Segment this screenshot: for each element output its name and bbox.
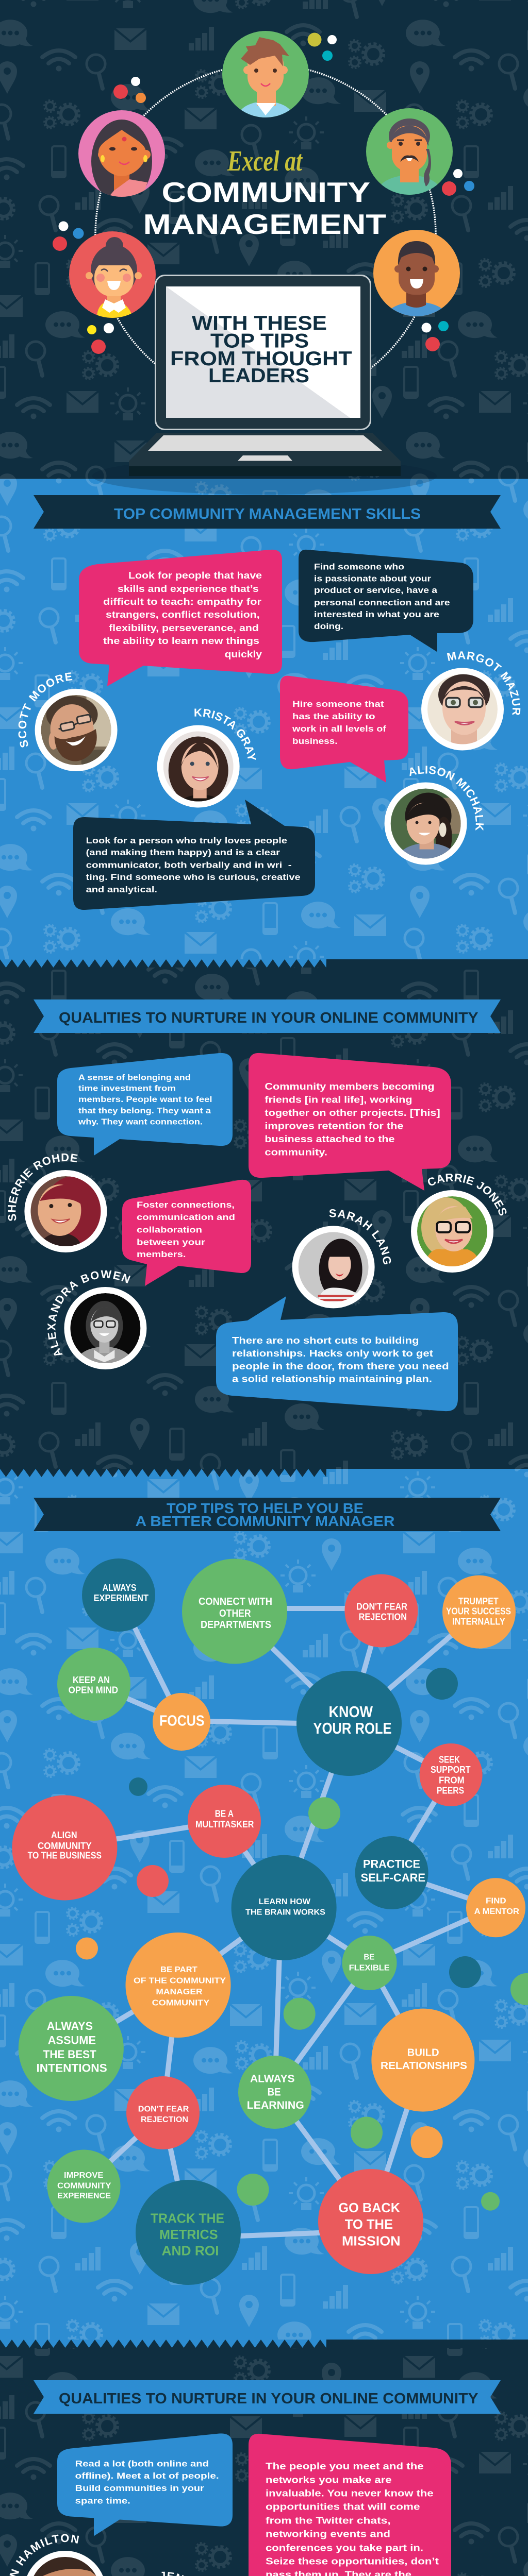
- panel: qualities to nurture, part two: [9, 2380, 501, 2576]
- node: be a multitasker: MULTITASKER: [195, 1819, 254, 1829]
- node: always be learning: [238, 2056, 311, 2129]
- quote: Evan Hamilton: [57, 2433, 233, 2536]
- banner heading: QUALITIES TO NURTURE IN YOUR ONLINE COMMUNITY: [59, 2391, 478, 2407]
- quote: Evan Hamilton: Build communities in your: [75, 2483, 204, 2493]
- dotted ring: [95, 64, 436, 404]
- node: always assume the best intentions: ASSUME: [48, 2033, 96, 2046]
- title: [143, 145, 386, 240]
- quote: Evan Hamilton: spare time.: [75, 2496, 130, 2506]
- quote: Scott Moore: flexibility, perseverance, and: [109, 623, 259, 633]
- node: align community to the business: COMMUNITY: [38, 1841, 92, 1851]
- panel: top community management skills: [19, 495, 521, 910]
- node: track the metrics and roi: AND ROI: [162, 2243, 219, 2258]
- quote: Carrie Jones: Community members becoming: [265, 1081, 435, 1092]
- quote: Alexandra Bowen: [122, 1180, 251, 1286]
- node: don't fear rejection: [344, 1574, 418, 1648]
- node: practice self-care: SELF-CARE: [361, 1871, 425, 1884]
- node: track the metrics and roi: TRACK THE: [151, 2210, 224, 2226]
- quote: Sarah Lang: a solid relationship maintaining plan.: [232, 1374, 432, 1384]
- banner heading: [34, 999, 501, 1033]
- node: be part of the community manager community: BE PART: [160, 1965, 197, 1974]
- node: know your role: KNOW: [329, 1703, 373, 1721]
- node: know your role: YOUR ROLE: [313, 1719, 392, 1737]
- quote: Sherrie Rohde: members. People want to feel: [78, 1095, 212, 1104]
- node: trumpet your success: [442, 1575, 516, 1649]
- quote: Scott Moore: Look for people that have: [128, 570, 262, 581]
- quote: Margot Mazur: doing.: [314, 621, 343, 631]
- node: keep an open mind: [57, 1648, 130, 1721]
- quote: Sarah Lang: There are no short cuts to building: [232, 1335, 419, 1346]
- node: learn how the brain works: LEARN HOW: [259, 1897, 311, 1906]
- laptop screen text: [170, 312, 352, 387]
- node: always assume the best intentions: THE BEST: [43, 2048, 96, 2061]
- node: practice self-care: PRACTICE: [363, 1858, 420, 1870]
- quote: Carrie Jones: friends [in real life], working: [265, 1095, 412, 1105]
- portrait: Alison Michalk: [385, 782, 467, 865]
- node: don't fear rejection, second: REJECTION: [141, 2115, 188, 2124]
- node: don't fear rejection, second: [126, 2076, 200, 2149]
- node: align community to the business: TO THE BUSINESS: [28, 1851, 102, 1861]
- node: find a mentor: [466, 1878, 525, 1937]
- quote: Sherrie Rohde: that they belong. They want a: [78, 1107, 211, 1115]
- laptop screen text: LEADERS: [208, 365, 309, 387]
- quote: Hannah Kovacs: [249, 2434, 451, 2576]
- panel: qualities to nurture, part one: [8, 999, 506, 1412]
- quote: Krista Gray: (and making them happy) and is a clear: [86, 848, 280, 857]
- quote: Margot Mazur: Find someone who: [314, 562, 404, 572]
- node: trumpet your success: TRUMPET: [458, 1596, 499, 1606]
- laptop screen text: FROM THOUGHT: [170, 348, 352, 370]
- node: improve community experience: IMPROVE: [64, 2171, 104, 2180]
- portrait: Margot Mazur: [421, 668, 504, 750]
- quote: Hannah Kovacs: networks you make are: [266, 2475, 392, 2485]
- header panel: [53, 31, 474, 495]
- quote: Margot Mazur: is passionate about your: [314, 574, 431, 583]
- node: trumpet your success: INTERNALLY: [452, 1617, 505, 1627]
- small accent dots: [76, 1668, 528, 2211]
- avatar: moustached man green: [366, 108, 453, 195]
- quote: Scott Moore: quickly: [225, 649, 262, 659]
- node: seek support from peers: SEEK: [439, 1754, 460, 1765]
- name: Krista Gray: KRISTA GRAY: [194, 708, 256, 760]
- quote: Krista Gray: and analytical.: [86, 885, 157, 894]
- quote: Margot Mazur: personal connection and are: [314, 598, 450, 607]
- quote: Margot Mazur: interested in what you are: [314, 609, 439, 619]
- name: Sherrie Rohde: SHERRIE ROHDE: [8, 1153, 77, 1221]
- node: always be learning: LEARNING: [247, 2099, 304, 2111]
- quote: Alison Michalk: work in all levels of: [292, 724, 386, 734]
- quote: Hannah Kovacs: networking events and: [266, 2529, 390, 2539]
- quote: Scott Moore: skills and experience that’s: [118, 584, 259, 594]
- panel: top tips network: [12, 1498, 528, 2285]
- shadow under laptop: [92, 457, 437, 495]
- quote: Carrie Jones: [249, 1053, 451, 1191]
- portrait: Alexandra Bowen: [64, 1287, 146, 1369]
- laptop screen text: TOP TIPS: [210, 330, 309, 352]
- node: focus: [153, 1693, 210, 1751]
- node: don't fear rejection, second: DON'T FEAR: [138, 2105, 189, 2114]
- banner heading: TOP COMMUNITY MANAGEMENT SKILLS: [114, 506, 421, 522]
- quote: Sherrie Rohde: why. They want connection.: [78, 1118, 203, 1127]
- node: align community to the business: ALIGN: [51, 1830, 77, 1840]
- node: connect with other departments: OTHER: [219, 1608, 251, 1619]
- quote: Hannah Kovacs: opportunities that will come: [266, 2502, 420, 2512]
- node: improve community experience: [47, 2149, 121, 2223]
- banner heading: A BETTER COMMUNITY MANAGER: [135, 1513, 395, 1529]
- node: always experiment: [82, 1558, 155, 1632]
- quote: Carrie Jones: together on other projects. [This]: [265, 1108, 440, 1118]
- node: build relationships: [371, 2009, 474, 2112]
- portrait: Sarah Lang: [292, 1226, 375, 1308]
- node: know your role: [296, 1671, 402, 1776]
- quote: Alison Michalk: has the ability to: [292, 711, 375, 721]
- node: keep an open mind: KEEP AN: [73, 1675, 110, 1685]
- node: connect with other departments: [182, 1559, 287, 1664]
- laptop screen text: WITH THESE: [192, 312, 327, 334]
- quote: Margot Mazur: [299, 550, 473, 652]
- node: build relationships: BUILD: [407, 2047, 439, 2058]
- title: MANAGEMENT: [143, 208, 386, 240]
- node: find a mentor: FIND: [486, 1896, 506, 1905]
- quote: Hannah Kovacs: The people you meet and the: [266, 2461, 424, 2471]
- banner heading: TOP TIPS TO HELP YOU BE: [167, 1500, 364, 1516]
- quote: Alison Michalk: business.: [292, 736, 337, 746]
- quote: Carrie Jones: improves retention for the: [265, 1121, 403, 1131]
- quote: Alison Michalk: Hire someone that: [292, 699, 384, 709]
- node: track the metrics and roi: METRICS: [159, 2227, 218, 2242]
- node: practice self-care: [355, 1836, 428, 1909]
- name: Sarah Lang: SARAH LANG: [329, 1209, 391, 1264]
- confetti dots: [53, 33, 474, 354]
- node: trumpet your success: YOUR SUCCESS: [446, 1606, 511, 1617]
- quote: Krista Gray: communicator, both verbally and in wri -: [86, 860, 292, 870]
- quote: Alexandra Bowen: collaboration: [137, 1225, 202, 1234]
- node: go back to the mission: GO BACK: [338, 2200, 400, 2215]
- banner heading: [34, 495, 501, 529]
- avatar: young man green: [222, 31, 309, 117]
- node: be part of the community manager community: OF THE COMMUNITY: [134, 1976, 226, 1985]
- quote: Scott Moore: difficult to teach: empathy for: [103, 597, 261, 607]
- node: be part of the community manager community: [126, 1933, 231, 2038]
- portrait: Scott Moore: [35, 689, 118, 774]
- node: seek support from peers: SUPPORT: [431, 1765, 471, 1775]
- network links: [64, 1595, 496, 2238]
- node: seek support from peers: PEERS: [437, 1786, 464, 1796]
- quote: Krista Gray: Look for a person who truly loves people: [86, 836, 287, 845]
- laptop illustration: [129, 275, 401, 476]
- quote: Hannah Kovacs: Seize these opportunities, don’t: [266, 2556, 439, 2567]
- banner heading: [34, 1498, 501, 1531]
- quote: Margot Mazur: product or service, have a: [314, 585, 438, 595]
- quote: Scott Moore: [79, 550, 282, 686]
- node: focus: FOCUS: [159, 1713, 204, 1729]
- node: be flexible: BE: [364, 1953, 375, 1961]
- node: go back to the mission: [318, 2169, 423, 2274]
- quote: Alexandra Bowen: between your: [137, 1238, 205, 1247]
- node: connect with other departments: CONNECT WITH: [199, 1596, 272, 1607]
- quote: Sherrie Rohde: [57, 1053, 233, 1156]
- title: COMMUNITY: [162, 176, 370, 208]
- quote: Scott Moore: strangers, conflict resolution,: [106, 609, 260, 620]
- name: Alison Michalk: ALISON MICHALK: [409, 766, 484, 831]
- node: be a multitasker: [188, 1785, 261, 1858]
- quote: Krista Gray: ting. Find someone who is curious, creative: [86, 872, 301, 882]
- node: build relationships: RELATIONSHIPS: [381, 2060, 467, 2072]
- node: be a multitasker: BE A: [215, 1808, 234, 1819]
- avatar: woman pink: [78, 110, 165, 203]
- quote: Sherrie Rohde: A sense of belonging and: [78, 1074, 191, 1082]
- banner heading: QUALITIES TO NURTURE IN YOUR ONLINE COMMUNITY: [59, 1010, 478, 1026]
- node: go back to the mission: MISSION: [342, 2233, 401, 2248]
- quote: Sarah Lang: [216, 1296, 458, 1411]
- node: seek support from peers: FROM: [439, 1775, 465, 1786]
- node: improve community experience: COMMUNITY: [57, 2181, 111, 2190]
- quote: Sherrie Rohde: time investment from: [78, 1084, 176, 1093]
- quote: Hannah Kovacs: from the Twitter chats,: [266, 2515, 391, 2526]
- avatar: woman red: [69, 231, 156, 318]
- name: Margot Mazur: MARGOT MAZUR: [447, 651, 521, 715]
- node: align community to the business: [12, 1795, 117, 1900]
- node: always experiment: EXPERIMENT: [94, 1593, 148, 1603]
- quote: Scott Moore: the ability to learn new things: [103, 636, 259, 646]
- avatar: man orange: [373, 230, 460, 316]
- node: track the metrics and roi: [136, 2180, 241, 2285]
- node: always be learning: ALWAYS: [250, 2073, 295, 2084]
- banner heading: [34, 2380, 501, 2414]
- portrait: Evan Hamilton: [24, 2551, 106, 2576]
- portrait: Carrie Jones: [411, 1190, 493, 1273]
- node: be part of the community manager community: MANAGER: [156, 1988, 203, 1996]
- quote: Evan Hamilton: Read a lot (both online and: [75, 2459, 209, 2469]
- quote: Krista Gray: [73, 800, 315, 910]
- quote: Alexandra Bowen: Foster connections,: [137, 1200, 235, 1210]
- quote: Alison Michalk: [280, 676, 408, 783]
- node: always assume the best intentions: [19, 1996, 124, 2101]
- quote: Sarah Lang: people in the door, from there you need: [232, 1361, 449, 1371]
- quote: Alexandra Bowen: members.: [137, 1249, 186, 1259]
- quote: Carrie Jones: business attached to the: [265, 1134, 395, 1144]
- quote: Hannah Kovacs: invaluable. You never know the: [266, 2488, 434, 2499]
- node: keep an open mind: OPEN MIND: [69, 1685, 118, 1696]
- node: improve community experience: EXPERIENCE: [57, 2192, 111, 2200]
- portrait: Krista Gray: [157, 725, 240, 815]
- node: be flexible: FLEXIBLE: [349, 1964, 390, 1972]
- node: always assume the best intentions: INTENTIONS: [36, 2062, 107, 2075]
- name: Alexandra Bowen: ALEXANDRA BOWEN: [47, 1270, 130, 1356]
- portrait: Sherrie Rohde: [24, 1170, 107, 1262]
- node: be flexible: [342, 1936, 397, 1990]
- node: connect with other departments: DEPARTMENTS: [201, 1619, 271, 1631]
- node: learn how the brain works: [232, 1855, 337, 1960]
- node: seek support from peers: [420, 1743, 483, 1806]
- node: always be learning: BE: [268, 2087, 281, 2098]
- quote: Hannah Kovacs: conferences you take part in.: [266, 2543, 423, 2553]
- title: Excel at: [227, 145, 303, 177]
- quote: Sarah Lang: relationships. Hacks only work to get: [232, 1348, 433, 1359]
- quote: Evan Hamilton: offline). Meet a lot of people.: [75, 2471, 219, 2481]
- node: learn how the brain works: THE BRAIN WORKS: [245, 1908, 325, 1917]
- node: always experiment: ALWAYS: [103, 1583, 136, 1593]
- node: always assume the best intentions: ALWAYS: [47, 2020, 93, 2032]
- node: go back to the mission: TO THE: [345, 2216, 393, 2232]
- node: be part of the community manager community: COMMUNITY: [152, 1999, 210, 2008]
- node: don't fear rejection: DON'T FEAR: [356, 1601, 407, 1612]
- quote: Carrie Jones: community.: [265, 1147, 327, 1158]
- name: Scott Moore: SCOTT MOORE: [19, 672, 72, 748]
- quote: Alexandra Bowen: communication and: [137, 1212, 235, 1222]
- node: find a mentor: A MENTOR: [474, 1907, 519, 1916]
- name: Carrie Jones: CARRIE JONES: [428, 1174, 506, 1216]
- node: don't fear rejection: REJECTION: [359, 1612, 407, 1622]
